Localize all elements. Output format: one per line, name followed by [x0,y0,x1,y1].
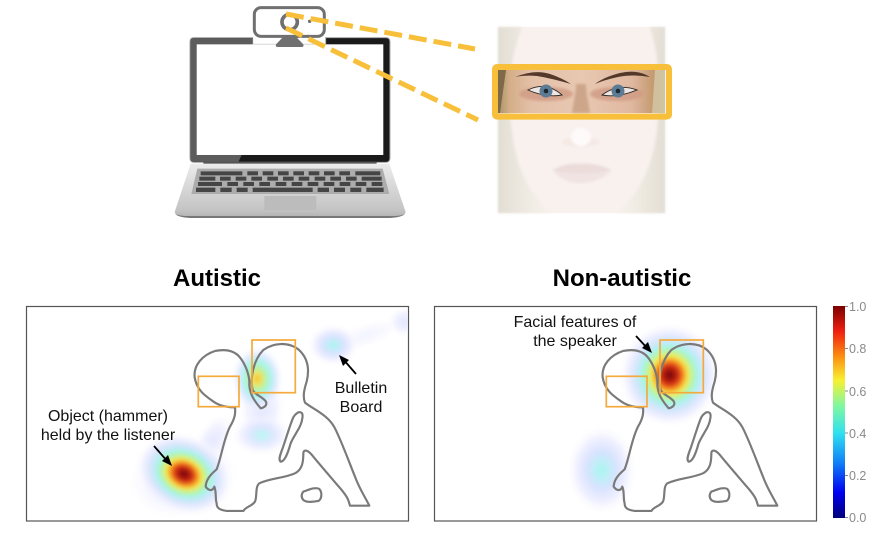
heading: Autistic: Autistic [173,265,261,292]
callout: object held by the listener: Object (hammer) [48,408,168,425]
dashed sight lines [286,14,478,120]
callout: facial features of the speaker [514,314,652,353]
heading: Non-autistic: Non-autistic [553,265,691,292]
webcam [254,8,324,47]
callout: facial features of the speaker: the speaker [533,333,617,350]
callout: bulletin board: Bulletin [335,380,387,397]
silhouette outline [195,344,369,511]
icon: laptop with webcam [175,8,406,218]
colorbar tick labels [849,300,866,525]
heatmap: non-autistic gaze density [574,329,714,506]
heatmap: autistic gaze density [141,309,408,512]
laptop keyboard [196,171,384,192]
callout: facial features of the speaker: Facial features of [514,314,637,331]
eye band photo [498,70,665,113]
panel: autistic heatmap [26,306,422,531]
icon: face photo [495,27,669,213]
callout: object held by the listener: held by the listener [41,427,176,444]
panel: non-autistic heatmap [434,306,816,521]
colorbar tick labels: 0.0 [849,511,866,525]
callout: bulletin board [335,355,387,416]
colorbar tick labels: 1.0 [849,300,866,314]
callout: bulletin board: Board [340,399,382,416]
colorbar tick labels: 0.2 [849,469,866,483]
area of interest boxes [198,340,295,407]
colorbar [833,300,866,525]
nose [562,128,600,147]
highlight rectangle [495,67,669,117]
area of interest boxes [606,340,703,407]
laptop base [175,162,406,218]
colorbar tick labels: 0.8 [849,342,866,356]
colorbar tick labels: 0.6 [849,385,866,399]
callout: object held by the listener [41,408,176,466]
silhouette outline [603,344,777,511]
colorbar tick labels: 0.4 [849,427,866,441]
laptop screen bezel [190,38,390,162]
lips [552,164,612,183]
